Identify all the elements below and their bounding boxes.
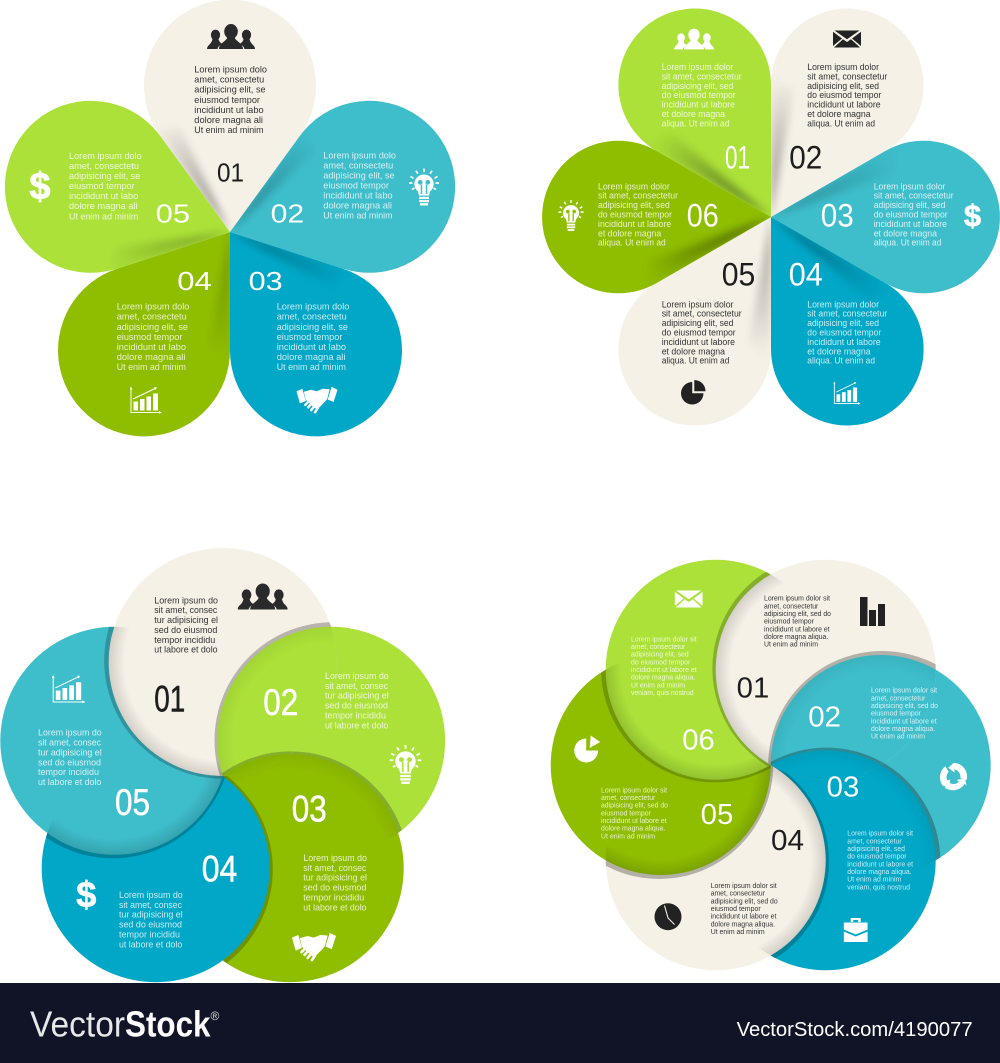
overlapping circle shapes <box>0 543 451 987</box>
text block: adipisicing elit, sed <box>598 200 670 210</box>
icon: growth chart <box>833 382 860 405</box>
text block: adipisicing elit, sed do <box>711 898 778 905</box>
text block: aliqua. Ut enim ad <box>807 356 875 366</box>
icon: people <box>674 29 714 49</box>
text block: incididunt ut labo <box>194 105 264 116</box>
text block: tempor incididu <box>325 710 386 720</box>
text block: do eiusmod tempor <box>598 210 672 220</box>
text block: incididunt ut labo <box>323 190 393 201</box>
text block: adipisicing elit, se <box>323 170 395 181</box>
text block: incididunt ut labore et <box>871 718 937 725</box>
text block: incididunt ut labore <box>807 100 881 110</box>
text block: dolore magna ali <box>323 200 392 212</box>
text block: Lorem ipsum dolo <box>323 150 396 161</box>
text block: Ut enim ad minim <box>117 362 186 373</box>
number 06: 06 <box>682 724 715 756</box>
text block: sit amet, consectetur <box>807 309 887 319</box>
text block: sit amet, consectetur <box>598 191 678 201</box>
petal shape 06 <box>542 141 771 293</box>
panel: circle 06 <box>631 590 715 756</box>
text block <box>69 151 142 222</box>
text block: Lorem ipsum dolor sit <box>711 883 777 890</box>
logo: VectorStock: Stock <box>125 1004 211 1045</box>
text block: eiusmod tempor <box>194 95 260 106</box>
number 02: 02 <box>271 199 304 229</box>
panel: circle 05 <box>574 736 733 840</box>
text block: amet, consectetur <box>847 838 902 845</box>
text block: eiusmod tempor <box>69 181 135 192</box>
text block: aliqua. Ut enim ad <box>598 238 666 248</box>
text block: adipisicing elit, sed do <box>601 803 668 810</box>
text block: Ut enim ad minim <box>277 362 346 373</box>
text block: amet, consectetu <box>277 312 347 323</box>
text block: Lorem ipsum dolor <box>598 181 670 191</box>
icon: growth chart <box>130 386 162 414</box>
text block: incididunt ut labore <box>598 219 671 229</box>
panel: petal 06 <box>542 141 771 293</box>
text block: sit amet, consectetur <box>662 309 742 319</box>
petal shape 03 <box>771 141 1000 293</box>
number 01: 01 <box>737 673 769 705</box>
text block: Lorem ipsum dolo <box>277 302 349 313</box>
text block <box>598 181 678 248</box>
chart: five petal teardrop diagram <box>4 0 456 436</box>
text block: do eiusmod tempor <box>662 90 736 100</box>
icon: cycle arrows <box>940 763 967 790</box>
text block: Lorem ipsum dolor <box>662 62 733 72</box>
text block: incididunt ut labo <box>69 191 138 202</box>
number 01: 01 <box>154 679 185 720</box>
number 01: 01 <box>725 139 750 175</box>
text block <box>711 883 778 936</box>
footer bar <box>0 983 1000 1063</box>
icon: handshake <box>292 933 336 960</box>
panel: petal 03 <box>230 232 402 436</box>
panel: circle 02 <box>263 671 421 784</box>
text block: sit amet, consectetur <box>807 71 887 81</box>
text block: adipisicing elit, se <box>277 322 348 333</box>
icon: envelope <box>833 30 861 48</box>
text block: amet, consectetu <box>194 75 264 86</box>
text block <box>847 831 913 891</box>
text block: adipisicing elit, se <box>117 322 188 333</box>
icon: pie chart <box>681 380 706 404</box>
text block: eiusmod tempor <box>764 619 815 626</box>
text block: dolore magna ali <box>117 352 185 363</box>
text block: tempor incididu <box>119 930 180 940</box>
text block: Ut enim ad minim <box>711 929 765 936</box>
text block: Ut enim ad minim <box>69 211 138 222</box>
icon: bar chart <box>860 597 885 626</box>
text block: do eiusmod tempor <box>874 210 948 220</box>
text block: incididunt ut labore et <box>764 626 830 633</box>
text block: tempor incididu <box>154 635 215 645</box>
number 05: 05 <box>115 782 150 823</box>
petal shape 03 <box>230 232 402 436</box>
text block: dolore magna aliqua. <box>847 869 912 876</box>
panel: petal 01 <box>618 8 771 217</box>
text block: Lorem ipsum dolor sit <box>631 636 697 643</box>
text block: adipisicing elit, sed <box>874 200 945 210</box>
text block: et dolore magna <box>874 228 937 238</box>
text block: Ut enim ad minim <box>194 125 264 136</box>
text block: adipisicing elit, se <box>194 85 266 96</box>
text block: aliqua. Ut enim ad <box>662 356 729 366</box>
number 03: 03 <box>292 789 327 830</box>
text block: Lorem ipsum do <box>325 671 389 681</box>
text block: Lorem ipsum dolor <box>662 299 733 309</box>
text block: amet, consectetur <box>631 644 686 651</box>
text block: eiusmod tempor <box>601 810 652 817</box>
text block: Lorem ipsum dolor <box>807 62 879 72</box>
text block: sit amet, consec <box>325 681 388 691</box>
number 05: 05 <box>701 799 733 831</box>
text block: incididunt ut labore <box>662 337 735 347</box>
panel: petal 05 <box>4 100 230 273</box>
icon: clock <box>654 903 682 930</box>
panel: circle 01 <box>737 596 885 705</box>
text block: incididunt ut labo <box>277 342 346 353</box>
text block <box>764 596 831 649</box>
number 03: 03 <box>249 266 283 296</box>
text block: eiusmod tempor <box>117 332 182 343</box>
text block: Ut enim ad minim <box>871 734 925 741</box>
text block: sed do eiusmod <box>325 701 388 711</box>
icon: pie chart <box>574 736 600 762</box>
text block: incididunt ut labore <box>662 100 735 110</box>
text block: amet, consectetur <box>871 695 926 702</box>
panel: petal 01 <box>144 0 316 232</box>
icon: growth chart <box>52 675 85 704</box>
panel: circle 02 <box>808 688 967 790</box>
chart: six petal teardrop diagram <box>542 0 1000 453</box>
text block: adipisicing elit, sed <box>662 81 733 91</box>
text block: sit amet, consec <box>154 605 218 615</box>
text block: amet, consectetur <box>601 795 656 802</box>
text block: sed do eiusmod <box>154 625 217 635</box>
text block <box>601 787 668 840</box>
petal shape 04 <box>58 232 230 436</box>
panel: circle 04 <box>76 849 237 949</box>
text block: incididunt ut labo <box>117 342 186 353</box>
text block: Ut enim ad minim <box>601 833 655 840</box>
text block: dolore magna aliqua. <box>601 826 665 833</box>
text block <box>119 890 183 949</box>
text block: sit amet, consec <box>119 900 182 910</box>
text block <box>874 181 954 248</box>
text block: sit amet, consectetur <box>874 191 954 201</box>
text block: ut labore et dolo <box>303 902 367 912</box>
text block: adipisicing elit, sed do <box>871 703 938 710</box>
panel: circle 01 <box>154 583 288 720</box>
text block: tempor incididu <box>303 892 364 902</box>
text block: et dolore magna <box>807 109 871 119</box>
text block: Lorem ipsum dolor sit <box>871 688 937 695</box>
text block <box>117 302 189 373</box>
text block: do eiusmod tempor <box>807 328 881 338</box>
icon: dollar: $ <box>964 198 981 233</box>
icon: light bulb <box>409 168 439 206</box>
text block: dolore magna aliqua. <box>764 634 828 641</box>
text block: do eiusmod tempor <box>807 90 881 100</box>
text block: Lorem ipsum do <box>154 595 218 605</box>
number 03: 03 <box>821 198 854 234</box>
text block <box>194 65 267 136</box>
logo: VectorStock: ® <box>210 1009 220 1023</box>
text block: Lorem ipsum dolo <box>194 65 267 76</box>
text block: incididunt ut labore <box>874 219 947 229</box>
text block: sit amet, consec <box>303 863 367 873</box>
text block: et dolore magna <box>662 109 725 119</box>
text block: ut labore et dolo <box>119 939 182 949</box>
text block: dolore magna aliqua. <box>711 921 775 928</box>
panel: petal 04 <box>58 232 230 436</box>
text block: amet, consectetur <box>764 603 819 610</box>
logo: VectorStock <box>30 1004 220 1045</box>
text block: Lorem ipsum dolor sit <box>847 831 913 838</box>
text block: incididunt ut labore <box>807 337 881 347</box>
text block <box>662 299 742 366</box>
overlapping circle shapes <box>545 554 996 976</box>
text block <box>154 595 218 655</box>
text block: Lorem ipsum dolo <box>69 151 142 162</box>
petal shape 01 <box>144 0 316 232</box>
text block: sed do eiusmod <box>38 757 101 767</box>
text block: eiusmod tempor <box>323 180 389 191</box>
text block: aliqua. Ut enim ad <box>662 118 729 128</box>
chart: six overlapping circles <box>545 554 996 976</box>
text block <box>303 853 367 912</box>
text block: do eiusmod tempor <box>662 328 736 338</box>
number 05: 05 <box>722 256 755 292</box>
panel: petal 02 <box>230 100 456 273</box>
number 06: 06 <box>687 198 719 234</box>
text block: tur adipisicing el <box>303 873 367 883</box>
text block: Lorem ipsum dolor <box>874 181 945 191</box>
petal shape 05 <box>4 100 230 273</box>
text block: Lorem ipsum do <box>119 890 183 900</box>
text block: sit amet, consectetur <box>662 71 742 81</box>
panel: circle 03 <box>827 772 913 942</box>
petal shape 02 <box>771 8 924 217</box>
text block: ut labore et dolo <box>38 777 101 787</box>
image id: VectorStock.com/4190077 <box>737 1019 973 1041</box>
text block: do eiusmod tempor <box>631 659 691 666</box>
icon: light bulb <box>558 200 584 231</box>
panel: petal 04 <box>771 217 924 426</box>
panel: circle 04 <box>654 825 804 936</box>
text block: dolore magna aliqua. <box>871 726 935 733</box>
panel: petal 03 <box>771 141 1000 293</box>
icon: dollar: $ <box>29 166 51 208</box>
text block <box>277 302 349 373</box>
text block <box>871 688 938 741</box>
text block <box>38 728 102 787</box>
text block <box>807 62 887 128</box>
text block: veniam, quis nostrud <box>631 690 694 697</box>
number 04: 04 <box>789 256 823 292</box>
number 04: 04 <box>202 849 237 890</box>
icon: light bulb <box>390 745 421 784</box>
text block: sed do eiusmod <box>303 883 366 893</box>
text block: tur adipisicing el <box>325 691 389 701</box>
text block: et dolore magna <box>807 346 871 356</box>
petal shape 01 <box>618 8 771 217</box>
panel: circle 03 <box>292 789 367 960</box>
text block: adipisicing elit, sed do <box>764 611 831 618</box>
text block: incididunt ut labore et <box>631 667 697 674</box>
text block: Ut enim ad minim <box>847 877 901 884</box>
text block: tur adipisicing el <box>38 747 102 757</box>
text block: adipisicing elit, se <box>69 171 140 182</box>
petal shape 04 <box>771 217 924 426</box>
petal shape 05 <box>618 217 771 426</box>
text block: eiusmod tempor <box>277 332 342 343</box>
panel: petal 02 <box>771 8 924 217</box>
number 04: 04 <box>177 266 212 296</box>
text block: Lorem ipsum do <box>38 728 102 738</box>
text block: incididunt ut labore et <box>601 818 667 825</box>
panel: circle 05 <box>38 675 150 823</box>
text block: dolore magna ali <box>69 201 138 212</box>
text block: adipisicing elit, sed <box>807 81 879 91</box>
text block: adipisicing elit, sed <box>631 652 689 659</box>
icon: handshake <box>296 387 338 412</box>
icon: dollar: $ <box>76 874 96 915</box>
text block: amet, consectetu <box>117 312 187 323</box>
text block: eiusmod tempor <box>711 906 761 913</box>
text block: do eiusmod tempor <box>847 854 907 861</box>
icon: people <box>238 583 288 610</box>
text block: adipisicing elit, sed <box>807 318 879 328</box>
text block: Lorem ipsum do <box>303 853 367 863</box>
text block <box>631 636 697 697</box>
number 03: 03 <box>827 772 859 804</box>
text block: Ut enim ad minim <box>764 642 818 649</box>
text block: et dolore magna <box>662 346 725 356</box>
text block: veniam, quis nostrud <box>847 884 910 891</box>
text block <box>325 671 389 730</box>
text block <box>662 62 742 128</box>
icon: briefcase <box>844 918 868 942</box>
chart: five overlapping circles <box>0 543 451 987</box>
text block: sed do eiusmod <box>119 920 182 930</box>
icon: people <box>207 24 255 49</box>
text block <box>323 150 396 222</box>
number 02: 02 <box>808 702 841 734</box>
text block: aliqua. Ut enim ad <box>874 238 941 248</box>
text block: aliqua. Ut enim ad <box>807 118 875 128</box>
text block: tur adipisicing el <box>119 910 183 920</box>
text block: Lorem ipsum dolor sit <box>601 787 667 794</box>
text block: incididunt ut labore et <box>711 914 776 921</box>
text block: Ut enim ad minim <box>323 210 393 222</box>
text block: Ut enim ad minim <box>631 682 685 689</box>
text block: sit amet, consec <box>38 738 101 748</box>
text block: dolore magna ali <box>277 352 345 363</box>
text block: dolore magna aliqua. <box>631 675 695 682</box>
text block: amet, consectetu <box>69 161 139 172</box>
text block: incididunt ut labore et <box>847 861 913 868</box>
number 02: 02 <box>263 682 298 723</box>
text block: ut labore et dolo <box>325 720 388 730</box>
text block: eiusmod tempor <box>871 711 922 718</box>
number 04: 04 <box>771 825 804 857</box>
text block: Lorem ipsum dolor <box>807 299 879 309</box>
text block: amet, consectetur <box>711 891 766 898</box>
text block <box>807 299 887 366</box>
text block: Lorem ipsum dolor sit <box>764 596 830 603</box>
panel: petal 05 <box>618 217 771 426</box>
text block: dolore magna ali <box>194 115 263 126</box>
text block: adipisicing elit, sed <box>847 846 905 853</box>
text block: et dolore magna <box>598 228 661 238</box>
number 01: 01 <box>217 158 244 188</box>
number 05: 05 <box>156 199 190 229</box>
text block: tur adipisicing el <box>154 615 218 625</box>
text block: Lorem ipsum dolo <box>117 302 189 313</box>
text block: amet, consectetu <box>323 160 393 171</box>
icon: envelope <box>675 590 703 608</box>
text block: adipisicing elit, sed <box>662 318 733 328</box>
text block: ut labore et dolo <box>154 645 218 655</box>
number 02: 02 <box>789 139 822 175</box>
text block: tempor incididu <box>38 767 99 777</box>
petal shape 02 <box>230 100 456 273</box>
logo: VectorStock: Vector <box>30 1004 125 1045</box>
